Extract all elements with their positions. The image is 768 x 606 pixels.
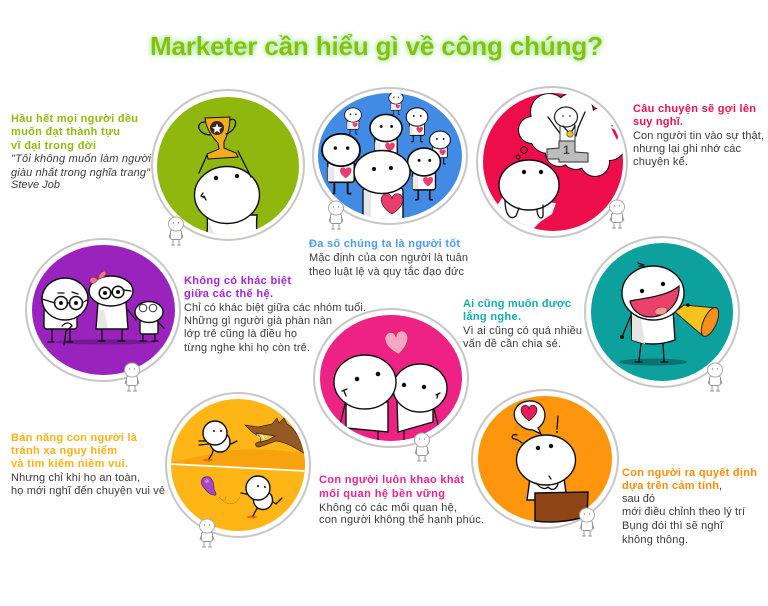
panel: listening (teal) <box>463 237 739 391</box>
title: Marketer cần hiểu gì về công chúng? <box>150 31 603 61</box>
text: listening: vấn đề cần chia sẻ. <box>463 338 561 350</box>
panel: stories (red) <box>477 87 764 237</box>
text: emotion decisions: dựa trên cảm tính <box>622 480 719 492</box>
text: emotion decisions: Bụng đói thì sẽ nghĩ <box>622 520 724 532</box>
text: generations <box>184 275 366 354</box>
text: listening <box>463 298 582 350</box>
small observer <box>414 433 430 461</box>
panel: relationships (pink) <box>314 309 484 526</box>
text: achievement: Steve Job <box>11 179 60 191</box>
small observer <box>124 363 140 391</box>
text: emotion decisions <box>622 467 757 546</box>
panel: instinct (yellow) <box>11 393 310 547</box>
illustration: wolf chase and butterfly <box>166 393 310 537</box>
text: listening: Vì ai cũng có quá nhiều <box>463 325 582 337</box>
text: generations: từng nghe khi họ còn trẻ. <box>184 342 310 354</box>
small observer <box>580 508 594 536</box>
text: listening: lắng nghe. <box>463 310 521 323</box>
text: generations: Không có khác biệt <box>184 275 291 287</box>
text: relationships: Không có các mối quan hệ, <box>319 502 457 514</box>
text: relationships: Con người luôn khao khát <box>319 474 464 486</box>
small observer <box>708 363 722 391</box>
text: achievement: muốn đạt thành tựu <box>11 126 120 138</box>
text: emotion decisions: Con người ra quyết định <box>622 467 757 479</box>
text: achievement: "Tôi không muốn làm người <box>11 153 152 165</box>
text: good people: Đa số chúng ta là người tốt <box>309 238 460 250</box>
illustration: thought cloud and podium: 1 <box>563 143 570 157</box>
text: stories: Câu chuyện sẽ gợi lên <box>633 103 756 115</box>
text: instinct: và tìm kiếm niềm vui. <box>11 458 128 470</box>
text: instinct: Nhưng chỉ khi họ an toàn, <box>11 472 140 484</box>
text: emotion decisions: , <box>719 480 722 492</box>
text: generations: lớp trẻ cũng là điều họ <box>184 328 297 340</box>
panel: emotion decisions (orange) <box>472 390 757 546</box>
small observer <box>200 519 214 547</box>
text: stories: Con người tin vào sự thật, <box>633 130 764 142</box>
text: emotion decisions: không thông. <box>622 534 688 546</box>
illustration: megaphone <box>585 237 739 387</box>
text: relationships <box>319 474 484 526</box>
illustration: trophy on head <box>152 90 304 244</box>
text: relationships: con người không thể hạnh phúc. <box>319 514 484 526</box>
text: instinct <box>11 432 165 497</box>
illustration: couple with heart <box>314 309 468 447</box>
text: stories: chuyện kể. <box>633 156 688 168</box>
text: achievement: Hầu hết mọi người đều <box>11 113 138 125</box>
text: achievement: giàu nhất trong nghĩa trang" <box>11 167 151 179</box>
illustration: thinking with heart bubble <box>472 390 618 528</box>
text: listening: Ai cũng muốn được <box>463 298 571 310</box>
text: instinct: tránh xa nguy hiểm <box>11 445 117 457</box>
small observer <box>610 200 624 228</box>
text: achievement <box>11 113 152 191</box>
text: good people: Mặc định của con người là tuân <box>309 252 468 264</box>
text: instinct: Bản năng con người là <box>11 432 138 444</box>
text: emotion decisions: sau đó <box>622 493 655 505</box>
illustration: crowd <box>313 88 467 228</box>
small observer <box>168 217 184 245</box>
text: emotion decisions: mới điều chỉnh theo lý trí <box>622 506 745 518</box>
text: good people: theo luật lệ và quy tắc đạo đức <box>309 265 464 278</box>
text: achievement: vĩ đại trong đời <box>11 140 96 152</box>
small observer <box>328 201 344 229</box>
panel: generations (purple) <box>26 239 366 391</box>
text: stories: suy nghĩ. <box>633 116 683 128</box>
text: good people <box>309 238 468 278</box>
panel: achievement (green) <box>11 90 304 245</box>
text: relationships: mối quan hệ bền vững <box>319 488 445 500</box>
text: generations: giữa các thế hệ. <box>184 288 273 300</box>
text: stories <box>633 103 764 168</box>
panel: good people (blue) <box>309 88 468 278</box>
text: instinct: họ mới nghĩ đến chuyện vui vẻ <box>11 485 165 497</box>
illustration: thought cloud and podium <box>477 87 627 237</box>
text: stories: nhưng lại ghi nhớ các <box>633 143 742 155</box>
illustration: family with glasses <box>26 239 180 381</box>
text: generations: Chỉ có khác biệt giữa các nhóm tuổi. <box>184 302 366 314</box>
text: generations: Những gì người già phàn nàn <box>184 315 332 327</box>
